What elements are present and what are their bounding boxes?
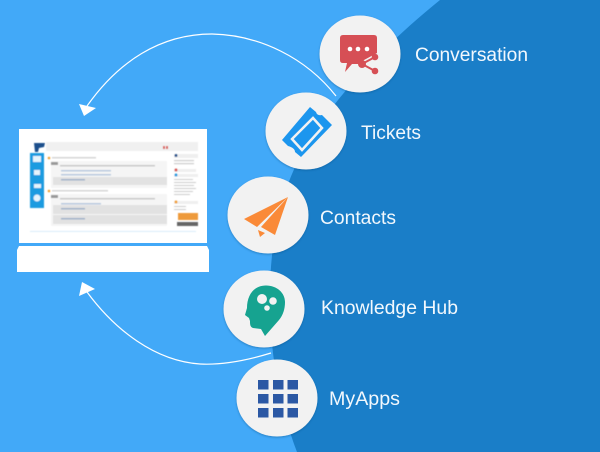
ticket row one: [48, 157, 167, 188]
circle: contacts: [228, 176, 308, 254]
laptop base: [17, 246, 209, 272]
label: Tickets: Tickets: [361, 123, 421, 144]
icon: head with gears: [245, 286, 285, 336]
circle: myapps: [236, 360, 318, 436]
circle: conversation: [320, 16, 400, 92]
circle: knowledge hub: [224, 270, 304, 348]
label: MyApps: MyApps: [329, 389, 400, 410]
arrow: bottom arc to laptop: [79, 282, 271, 364]
label: Conversation: Conversation: [415, 45, 528, 66]
app search bar: [46, 142, 198, 151]
ticket row two: [48, 190, 167, 226]
label: Contacts: Contacts: [320, 208, 396, 229]
circle: tickets: [266, 92, 346, 170]
arrow: top arc to laptop: [79, 34, 336, 116]
screenshot: app dashboard: [30, 142, 198, 232]
right column widgets: [174, 154, 198, 226]
background dark blue curved panel: [270, 0, 600, 452]
icon: chat bubble with share: [340, 35, 378, 74]
app sidebar: [30, 153, 44, 208]
icon: app grid: [258, 380, 298, 418]
icon: ticket: [282, 107, 332, 157]
label: Knowledge Hub: Knowledge Hub: [321, 298, 458, 319]
screen footer line: [30, 230, 196, 233]
icon: paper plane: [244, 197, 288, 237]
alert flags: [163, 146, 168, 149]
laptop: [17, 129, 209, 272]
laptop screen: [19, 129, 207, 243]
app logo: [34, 143, 45, 152]
